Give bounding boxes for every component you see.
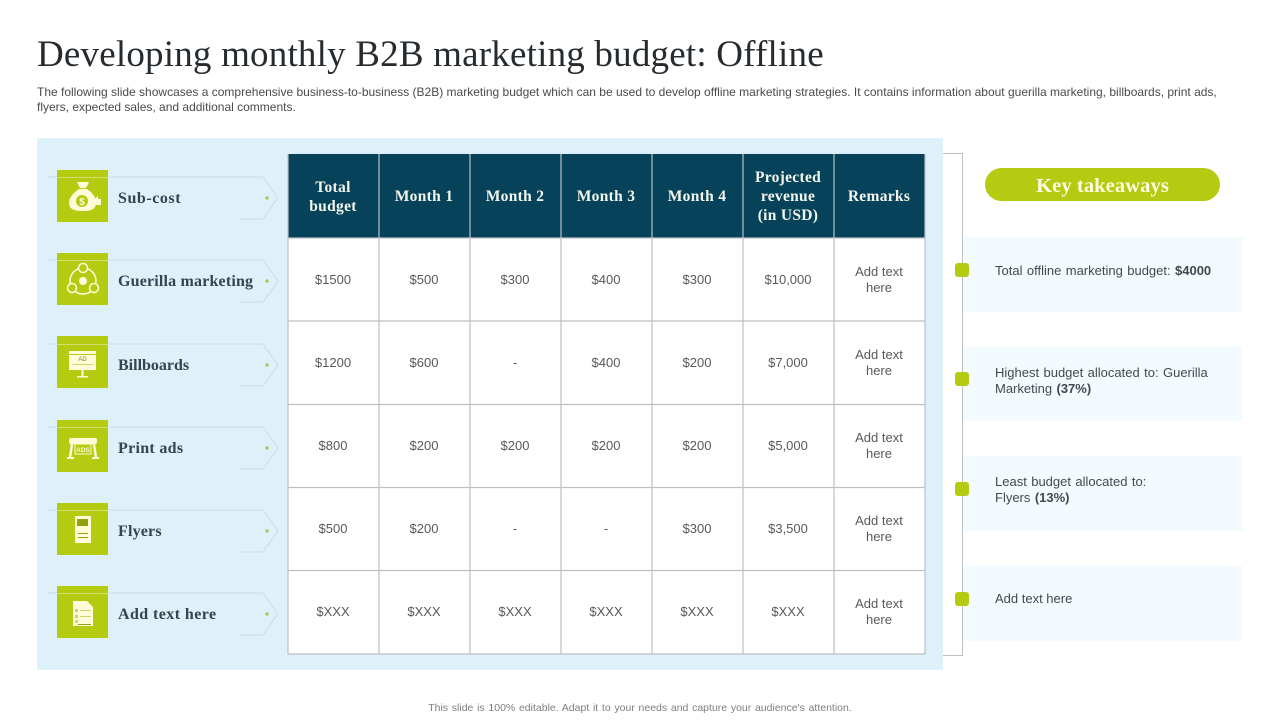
icon: flyer <box>57 510 108 543</box>
table: budget: Add text <box>855 264 903 278</box>
table: budget: Add text <box>855 513 903 528</box>
icon: billboard: AD <box>78 357 87 363</box>
takeaway 2 <box>955 346 1242 421</box>
table: budget: Total <box>315 179 351 196</box>
table: budget: $400 <box>592 354 620 370</box>
table: budget: $XXX <box>589 604 623 619</box>
table: budget: Month 4 <box>668 188 726 204</box>
table: budget: $200 <box>410 521 438 536</box>
table: budget: $1500 <box>315 272 351 286</box>
table: budget: $200 <box>683 354 711 370</box>
icon: document list <box>57 593 108 626</box>
takeaway 3: Flyers (13%) <box>995 490 1070 505</box>
icon: money bag: $ <box>79 197 85 208</box>
description: The following slide showcases a comprehensive business-to-business (B2B) marketing budget which can be used to develop offline marketing strategies. It contains information about guerilla marketing, billboards, print ads, <box>37 85 1217 99</box>
table: budget: $5,000 <box>768 438 808 453</box>
table: budget: - <box>513 354 517 370</box>
key takeaways pill: Key takeaways <box>1036 175 1169 197</box>
table: budget: - <box>604 521 608 536</box>
takeaway 2: Marketing (37%) <box>995 381 1091 396</box>
table: budget: $XXX <box>498 604 532 619</box>
table: budget: Add text <box>855 430 903 445</box>
icon: printer <box>57 427 108 459</box>
title: Developing monthly B2B marketing budget: Offline <box>37 34 824 75</box>
table: budget: $XXX <box>771 604 805 619</box>
row label: Print ads <box>47 420 278 472</box>
table header background <box>288 154 925 238</box>
icon: money bag <box>57 177 108 211</box>
table: budget: $600 <box>410 354 438 370</box>
row label: Flyers: Flyers <box>118 523 162 540</box>
table: budget: $1200 <box>315 354 351 370</box>
table row: Sub-cost <box>315 264 903 294</box>
table: budget: $200 <box>683 438 711 453</box>
table body background <box>288 238 925 654</box>
description: flyers, expected sales, and additional comments. <box>37 100 296 114</box>
row label: Guerilla marketing <box>47 253 278 305</box>
table row: Flyers <box>316 596 903 627</box>
table: budget: Add text <box>855 346 903 362</box>
table row: Guerilla marketing <box>315 346 903 378</box>
row label: Guerilla marketing: Guerilla marketing <box>118 273 253 290</box>
table: budget: $XXX <box>680 604 714 619</box>
row label: Sub-cost: Sub-cost <box>118 190 181 207</box>
table: budget: $300 <box>501 272 529 286</box>
takeaway 1: Total offline marketing budget: $4000 <box>995 263 1211 278</box>
takeaway 1 <box>955 237 1242 312</box>
table: budget: $200 <box>501 438 529 453</box>
table: budget: Remarks <box>848 188 910 204</box>
table: budget: budget <box>309 198 357 215</box>
table: budget: $7,000 <box>768 354 808 370</box>
table: budget: $XXX <box>407 604 441 619</box>
table headers <box>309 168 910 224</box>
table: budget: $200 <box>410 438 438 453</box>
row label: Billboards: Billboards <box>118 357 189 374</box>
table: budget: $500 <box>410 272 438 286</box>
table: budget: (in USD) <box>758 206 818 224</box>
table: budget: $200 <box>592 438 620 453</box>
table: budget: here <box>866 612 892 627</box>
table: budget: $300 <box>683 272 711 286</box>
row label: Billboards <box>47 336 278 388</box>
key takeaways pill <box>985 168 1220 201</box>
panel: budget background <box>37 138 943 670</box>
table: budget: here <box>866 280 892 294</box>
row label: Add text here <box>47 586 278 638</box>
takeaway 4 <box>955 566 1242 641</box>
table row: Print ads <box>318 513 903 544</box>
takeaway 3: Least budget allocated to: <box>995 474 1146 489</box>
footer note: This slide is 100% editable. Adapt it to your needs and capture your audience's attention. <box>428 702 852 714</box>
table: budget: $400 <box>592 272 620 286</box>
table: budget: Month 3 <box>577 188 635 204</box>
table: budget: here <box>866 529 892 544</box>
table: budget: $800 <box>319 438 347 453</box>
table: budget: Month 1 <box>395 188 453 204</box>
row label: Sub-cost <box>47 170 278 222</box>
table: budget: here <box>866 446 892 461</box>
table: budget: $10,000 <box>764 272 812 286</box>
icon: guerilla circle <box>57 260 108 295</box>
icon: billboard <box>57 344 108 378</box>
row label: Print ads: Print ads <box>118 440 183 457</box>
icon: printer: ADS <box>76 447 91 454</box>
table row: Billboards <box>318 430 903 461</box>
table: budget: $3,500 <box>768 521 808 536</box>
table: budget: - <box>513 521 517 536</box>
table: budget: Month 2 <box>486 188 544 204</box>
takeaway 4: Add text here <box>995 591 1072 606</box>
row label: Add text here: Add text here <box>118 606 216 623</box>
row label: Flyers <box>47 503 278 555</box>
takeaway bracket line <box>943 153 963 656</box>
table: budget: Projected <box>755 168 821 186</box>
table: budget: here <box>866 362 892 378</box>
takeaway 2: Highest budget allocated to: Guerilla <box>995 365 1208 380</box>
table: budget: revenue <box>761 188 815 204</box>
table: budget: $XXX <box>316 604 350 619</box>
table: budget: Add text <box>855 596 903 611</box>
description <box>37 85 1217 114</box>
table: budget: $500 <box>319 521 347 536</box>
table: budget: $300 <box>683 521 711 536</box>
takeaway 3 <box>955 456 1242 531</box>
